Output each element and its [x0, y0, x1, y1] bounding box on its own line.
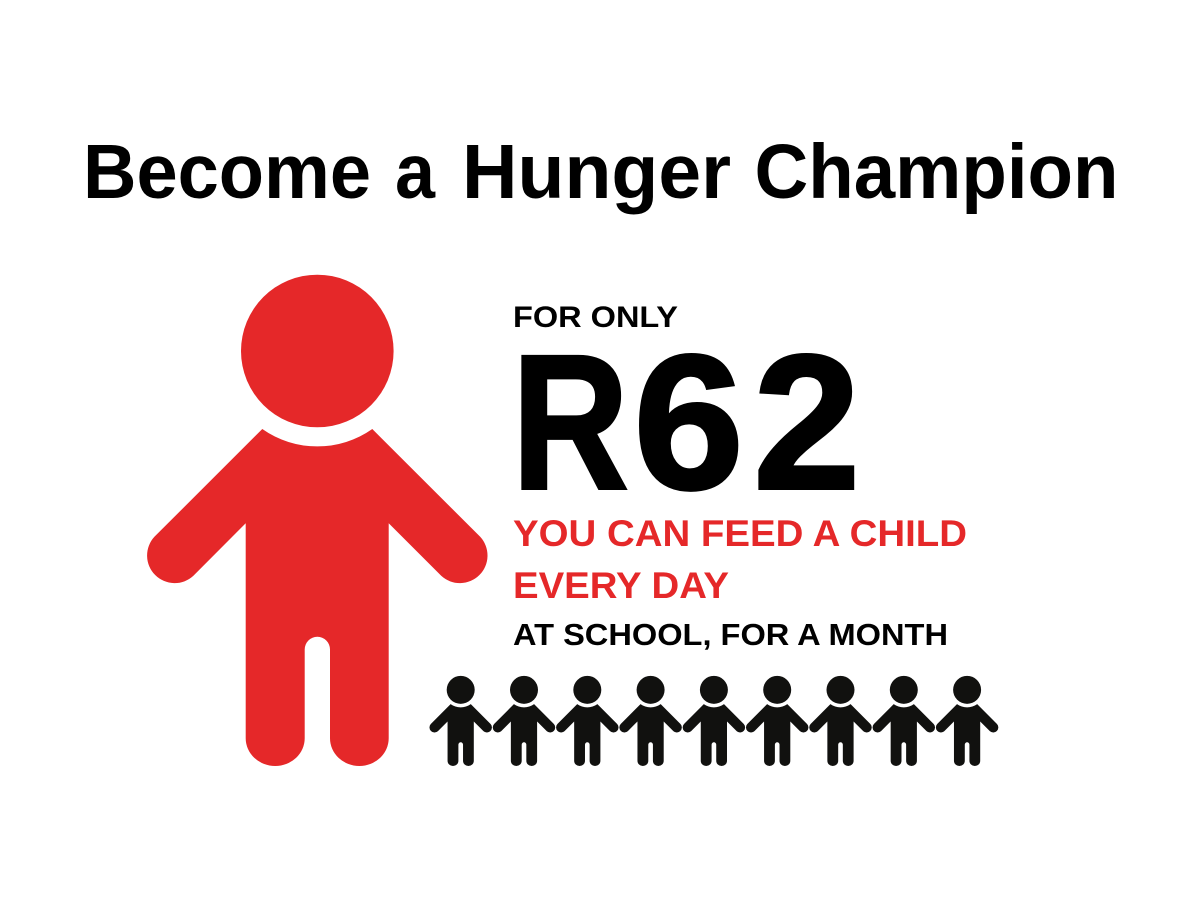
icon: small child 9: [936, 676, 998, 766]
icon: small child 1: [429, 676, 492, 766]
price: R62: [512, 314, 860, 530]
icon: small child 4: [619, 676, 682, 766]
price: R62: 6: [633, 316, 744, 530]
text: at school, for a month: AT SCHOOL, FOR A MONTH: [513, 617, 948, 652]
text: for only: FOR ONLY: [513, 301, 678, 334]
icon: small child 6: [746, 676, 808, 766]
icon: small child 5: [683, 676, 745, 766]
price: R62: 2: [753, 315, 860, 529]
title: a: [395, 129, 436, 215]
icon: small child 8: [873, 676, 935, 766]
icon: large red child figure: [147, 275, 488, 766]
row of nine small children: [429, 676, 998, 766]
icon: small child 7: [809, 676, 872, 766]
icon: small child 3: [556, 676, 619, 766]
title: Become: [83, 129, 371, 215]
title: Hunger: [462, 129, 731, 215]
title: Champion: [754, 129, 1118, 215]
text: you can feed a child: YOU CAN FEED A CHILD: [513, 513, 967, 554]
price: R62: R: [512, 314, 629, 530]
text: every day: EVERY DAY: [513, 565, 729, 606]
icon: small child 2: [493, 676, 555, 766]
